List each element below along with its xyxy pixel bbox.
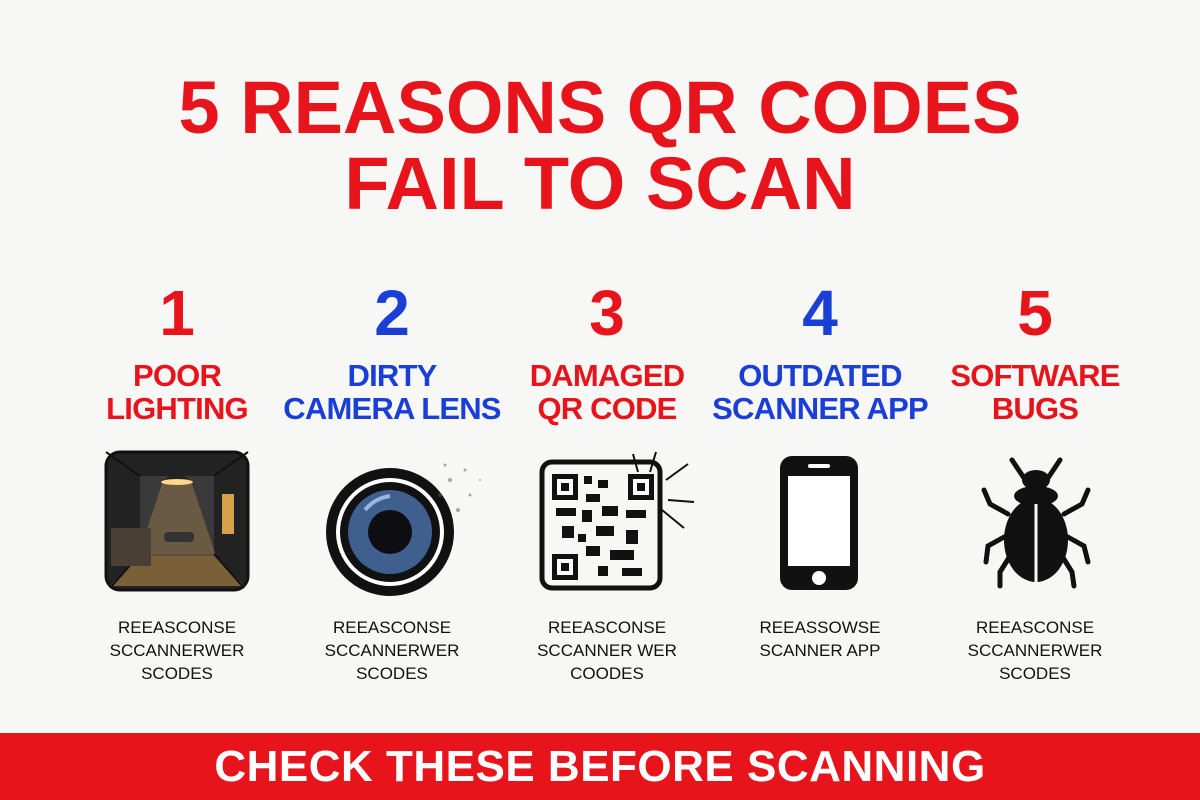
caption 2: SCODES bbox=[356, 664, 428, 683]
title: 5 REASONS QR CODES bbox=[179, 66, 1021, 149]
caption 5: SCODES bbox=[999, 664, 1071, 683]
footer banner: CHECK THESE BEFORE SCANNING bbox=[214, 742, 986, 791]
caption 1: SCODES bbox=[141, 664, 213, 683]
column 4 heading: 4 bbox=[802, 277, 838, 349]
title bbox=[179, 66, 1021, 225]
column 5 heading: BUGS bbox=[992, 391, 1078, 426]
icon: bug bbox=[982, 458, 1090, 588]
icon: camera lens bbox=[326, 464, 481, 596]
caption 4: SCANNER APP bbox=[760, 641, 880, 660]
caption 3: REEASCONSE bbox=[548, 618, 666, 637]
column 3 heading: DAMAGED bbox=[530, 358, 684, 393]
caption 2: REEASCONSE bbox=[333, 618, 451, 637]
column 2 heading: 2 bbox=[374, 277, 410, 349]
column 2 heading: DIRTY bbox=[347, 358, 436, 393]
caption 4 bbox=[760, 618, 880, 660]
column 1 heading: POOR bbox=[133, 358, 221, 393]
icon: smartphone bbox=[780, 456, 858, 590]
footer banner bbox=[0, 733, 1200, 800]
caption 2 bbox=[325, 618, 459, 683]
caption 4: REEASSOWSE bbox=[760, 618, 880, 637]
column 3 heading bbox=[530, 277, 684, 426]
caption 3: SCCANNER WER bbox=[537, 641, 677, 660]
caption 5 bbox=[968, 618, 1102, 683]
column 1 heading: 1 bbox=[159, 277, 195, 349]
caption 3: COODES bbox=[570, 664, 644, 683]
column 4 heading: SCANNER APP bbox=[712, 391, 928, 426]
column 1 heading bbox=[106, 277, 248, 426]
caption 2: SCCANNERWER bbox=[325, 641, 459, 660]
column 5 heading: SOFTWARE bbox=[950, 358, 1120, 393]
icon: damaged QR code bbox=[540, 452, 694, 590]
column 4 heading: OUTDATED bbox=[738, 358, 902, 393]
caption 3 bbox=[537, 618, 677, 683]
column 1 heading: LIGHTING bbox=[106, 391, 248, 426]
caption 5: REEASCONSE bbox=[976, 618, 1094, 637]
caption 1: REEASCONSE bbox=[118, 618, 236, 637]
column 4 heading bbox=[712, 277, 928, 426]
title: FAIL TO SCAN bbox=[344, 142, 856, 225]
column 5 heading: 5 bbox=[1017, 277, 1053, 349]
column 3 heading: QR CODE bbox=[537, 391, 677, 426]
column 3 heading: 3 bbox=[589, 277, 625, 349]
caption 1: SCCANNERWER bbox=[110, 641, 244, 660]
column 2 heading bbox=[283, 277, 501, 426]
column 5 heading bbox=[950, 277, 1120, 426]
caption 1 bbox=[110, 618, 244, 683]
icon: dark room bbox=[104, 450, 250, 592]
column 2 heading: CAMERA LENS bbox=[283, 391, 501, 426]
caption 5: SCCANNERWER bbox=[968, 641, 1102, 660]
